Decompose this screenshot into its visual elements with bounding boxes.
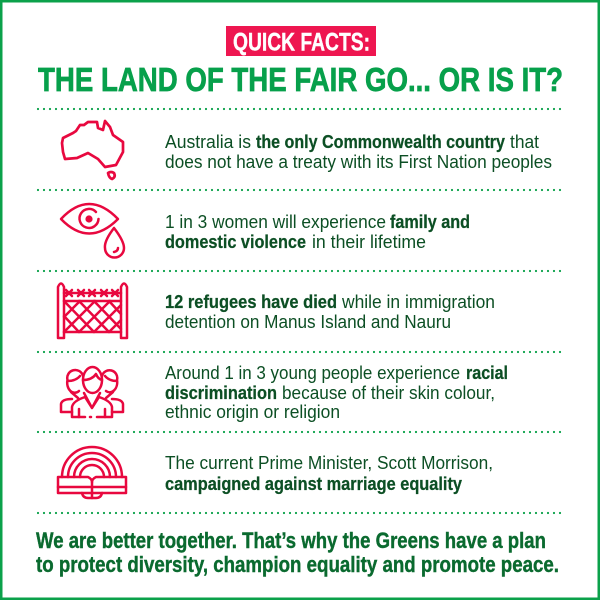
text: treaty: the only Commonwealth country <box>256 131 506 152</box>
text: violence <box>165 211 470 252</box>
row: family violence fact <box>61 204 470 258</box>
row: marriage equality fact <box>58 447 493 498</box>
text: violence: 1 in 3 women will experience <box>165 211 386 232</box>
row: refugees fact <box>58 284 495 338</box>
text: treaty <box>165 131 552 172</box>
text: marriage equality: The current Prime Minister, Scott Morrison, <box>165 452 493 473</box>
text: racial discrimination: discrimination <box>165 382 277 403</box>
text: racial discrimination <box>165 362 508 422</box>
text: racial discrimination: ethnic origin or religion <box>165 401 340 422</box>
text: racial discrimination: Around 1 in 3 young people experience <box>165 362 460 383</box>
text: violence: in their lifetime <box>312 231 426 252</box>
text: racial discrimination: because of their skin colour, <box>282 382 495 403</box>
badge: quick facts: QUICK FACTS: <box>233 28 370 56</box>
text: refugees <box>165 291 495 332</box>
text: refugees: while in immigration <box>341 291 495 312</box>
icon: detention fence <box>58 284 127 338</box>
text: marriage equality <box>165 452 493 494</box>
text: refugees: 12 refugees have died <box>165 291 337 312</box>
text: racial discrimination: racial <box>466 362 508 383</box>
icon: eye with tear <box>61 204 124 258</box>
text: marriage equality: campaigned against marriage equality <box>165 473 463 494</box>
row: treaty fact <box>62 121 552 179</box>
icon: map of Australia <box>62 121 123 179</box>
text: violence: domestic violence <box>165 231 306 252</box>
text: treaty: Australia is <box>165 131 251 152</box>
icon: rainbow over open book <box>58 447 126 498</box>
row: racial discrimination fact <box>61 362 508 422</box>
text: refugees: detention on Manus Island and Nauru <box>165 311 451 332</box>
closing statement <box>36 528 559 577</box>
text: treaty: that <box>510 131 539 152</box>
icon: group of people <box>61 367 123 417</box>
text: violence: family and <box>390 211 470 232</box>
text: treaty: does not have a treaty with its First Nation peoples <box>165 151 552 172</box>
